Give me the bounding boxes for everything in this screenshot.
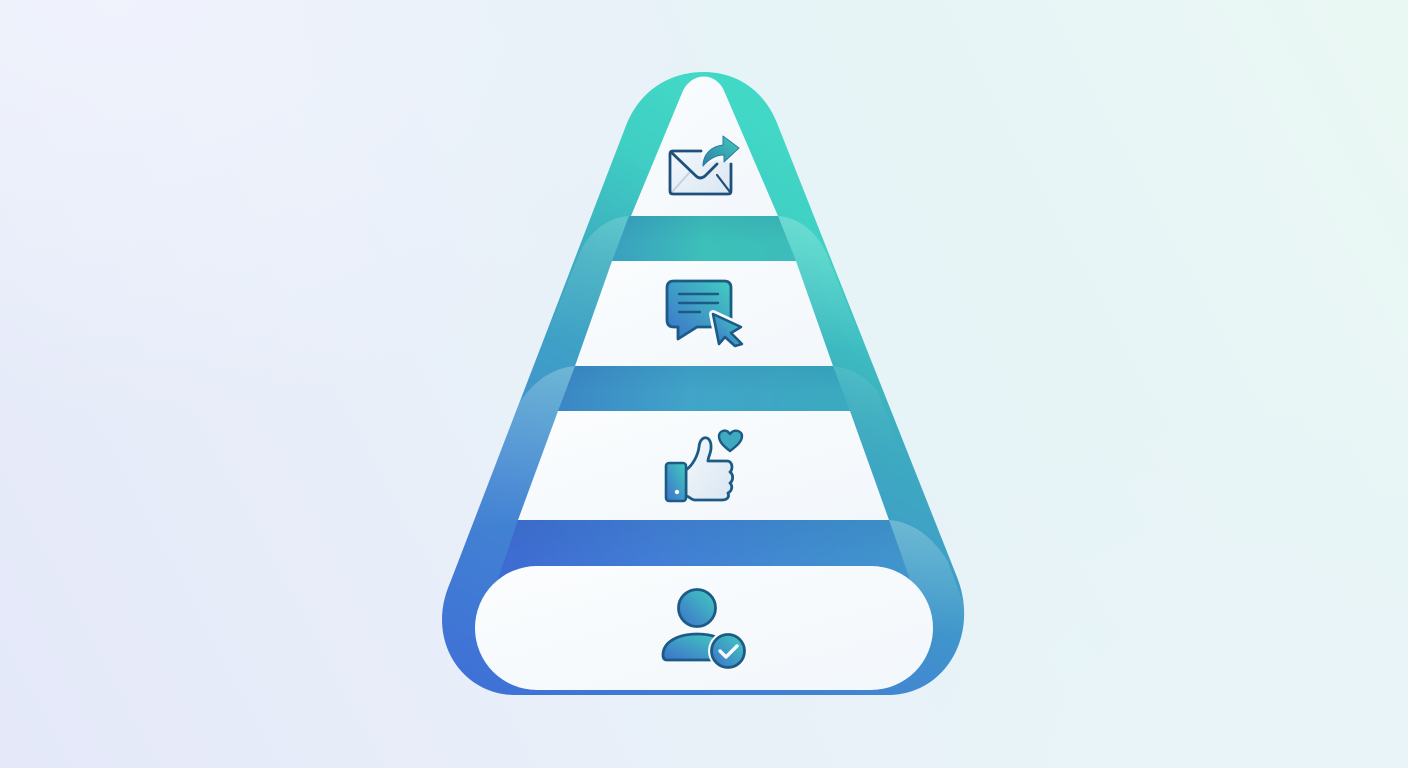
ribbon highlights — [470, 216, 975, 635]
tier 4 panel: base — [475, 566, 933, 690]
tier 2 panel — [575, 261, 833, 366]
tier 3 panel — [518, 411, 889, 520]
icon: envelope with share arrow — [670, 136, 739, 194]
pyramid diagram — [442, 72, 964, 695]
icon: chat bubble with cursor — [667, 281, 742, 346]
band 1 — [612, 216, 796, 261]
band 2 — [558, 366, 850, 411]
outer pyramid ribbon — [442, 72, 964, 695]
icon: user with check badge — [663, 590, 748, 671]
band 3 — [496, 520, 912, 585]
icon: thumbs up with heart — [666, 431, 742, 501]
tier 1 panel: top — [631, 76, 778, 216]
